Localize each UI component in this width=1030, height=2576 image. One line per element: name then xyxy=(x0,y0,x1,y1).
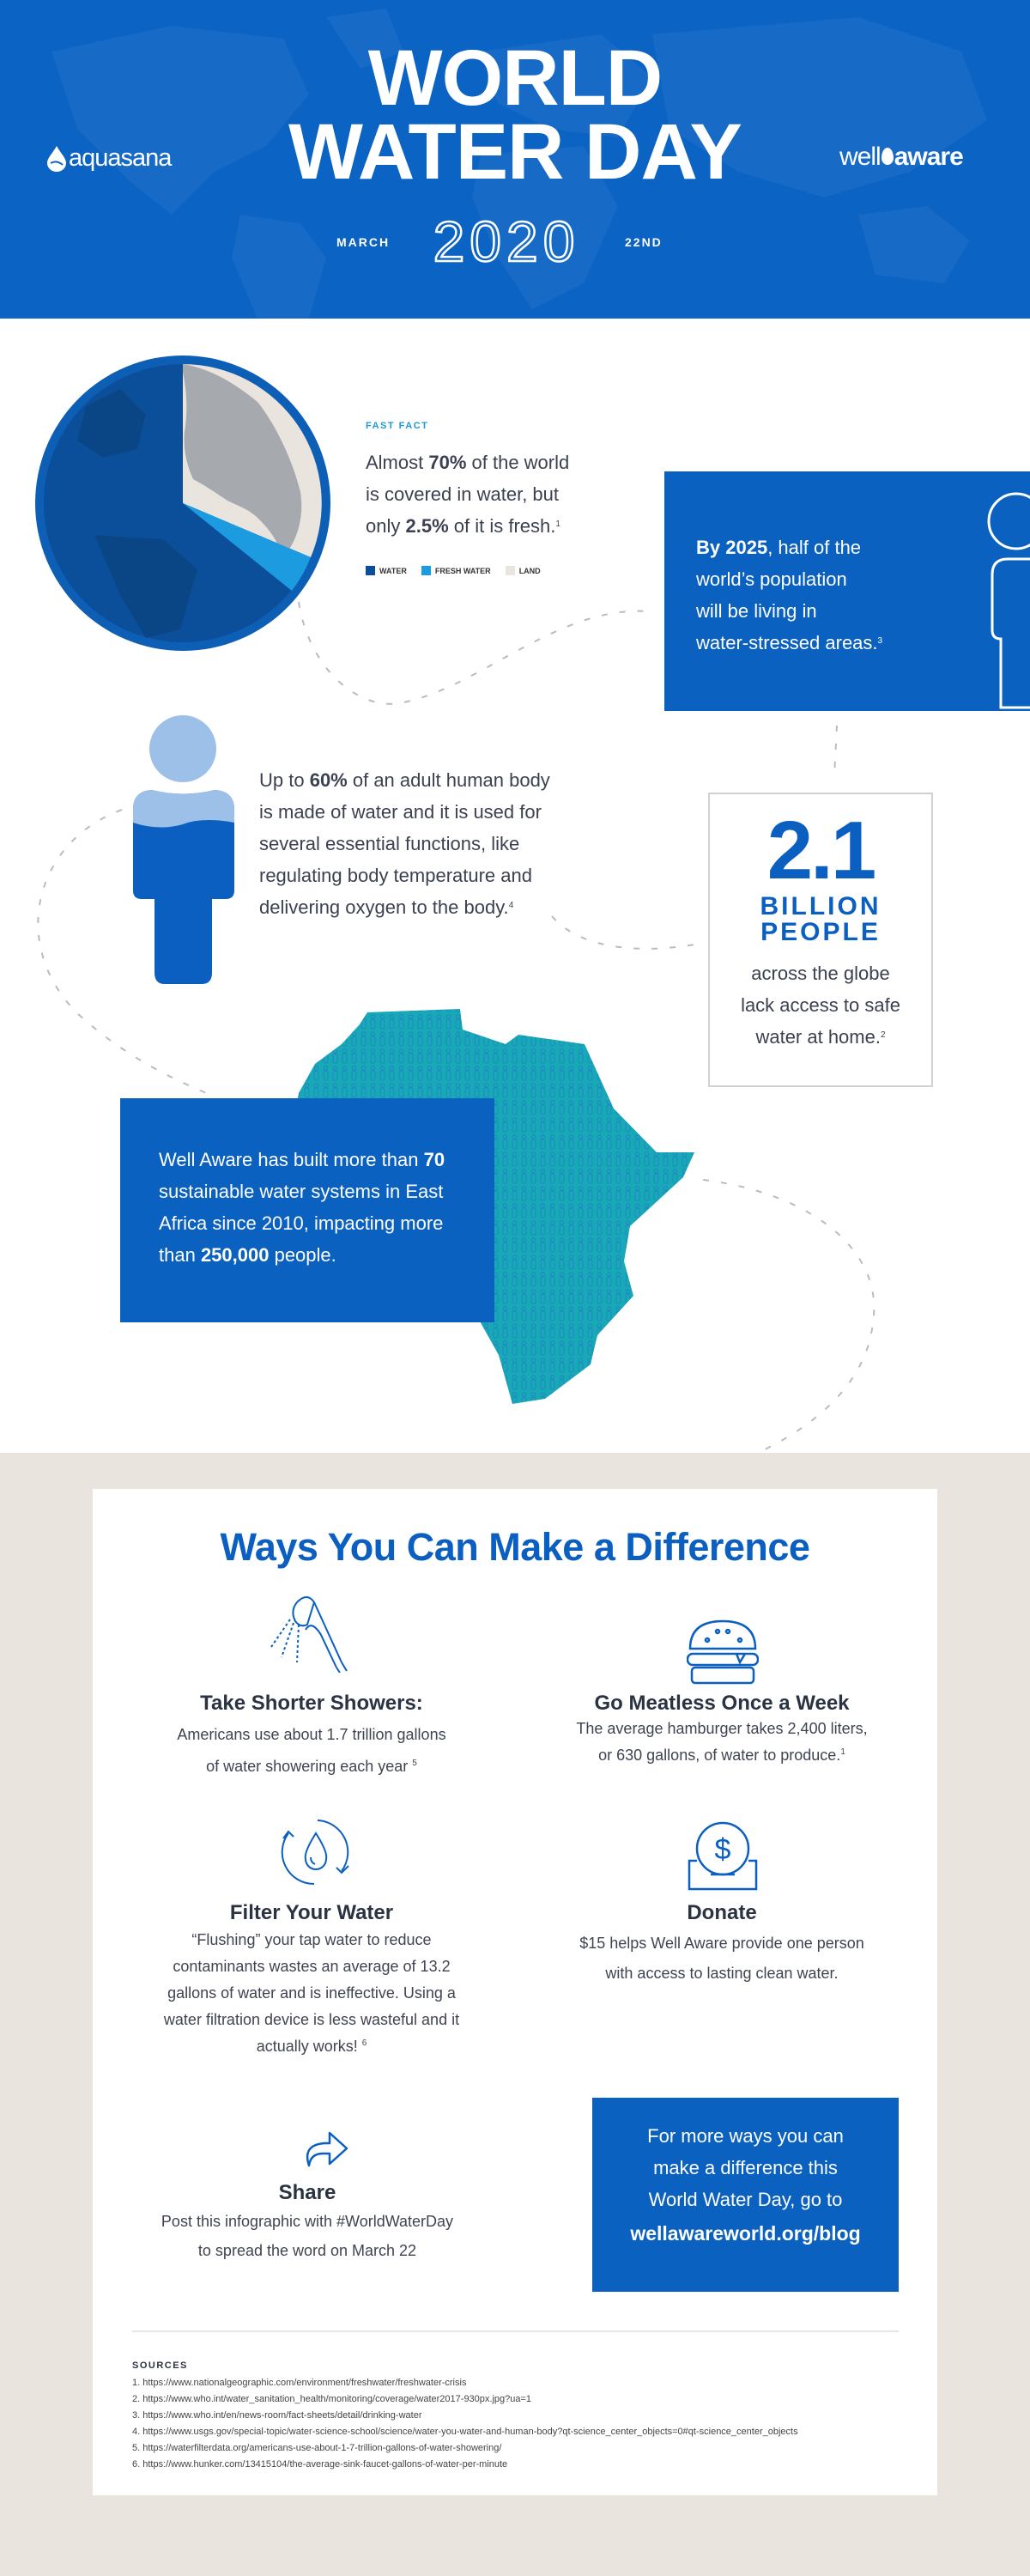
item: share: to spread the word on March 22 xyxy=(198,2242,416,2259)
text: body water: is made of water and it is used for xyxy=(259,801,542,823)
sources: 5. https://waterfilterdata.org/americans-use-about-1-7-trillion-gallons-of-water-showering/ xyxy=(132,2443,501,2453)
icon: donate: $ xyxy=(715,1833,731,1866)
panel: 2.1 billion people: across the globe xyxy=(751,963,890,984)
text: body water xyxy=(259,769,550,918)
item: filter water: contaminants wastes an average of 13.2 xyxy=(173,1958,451,1975)
callout: more ways xyxy=(592,2098,899,2292)
icon: burger xyxy=(687,1619,759,1685)
sources: 6. https://www.hunker.com/13415104/the-average-sink-faucet-gallons-of-water-per-minute xyxy=(132,2459,507,2470)
item: filter water: Filter Your Water xyxy=(230,1901,393,1924)
item: donate: $15 helps Well Aware provide one person xyxy=(579,1935,864,1952)
heading: Ways You Can Make a Difference xyxy=(221,1525,809,1569)
item: shorter showers: Take Shorter Showers: xyxy=(200,1692,423,1715)
date line: MARCH xyxy=(336,235,390,249)
sources xyxy=(132,2360,798,2470)
item: shorter showers: of water showering each year 5 xyxy=(206,1758,417,1775)
item: filter water: gallons of water and is ineffective. Using a xyxy=(167,1984,456,2002)
panel: Well Aware impact: Africa since 2010, impacting more xyxy=(159,1212,443,1234)
item: filter water: “Flushing” your tap water to reduce xyxy=(191,1931,432,1948)
panel: 2.1 billion people: water at home.2 xyxy=(755,1026,886,1048)
callout: more ways: For more ways you can xyxy=(647,2125,844,2147)
item: share xyxy=(161,2181,453,2259)
panel: 2.1 billion people: BILLION xyxy=(760,892,881,920)
map background xyxy=(52,9,987,319)
item: meatless: The average hamburger takes 2,400 liters, xyxy=(576,1720,868,1737)
panel: Well Aware impact: Well Aware has built more than 70 xyxy=(159,1149,445,1170)
item: donate: with access to lasting clean water. xyxy=(605,1965,839,1982)
item: filter water xyxy=(163,1901,459,2055)
title: WORLD xyxy=(368,34,662,122)
icon: person outline xyxy=(987,493,1030,709)
panel: 2.1 billion people: PEOPLE xyxy=(760,918,881,946)
text: body water: delivering oxygen to the body.4 xyxy=(259,896,513,918)
panel: 2.1 billion people: lack access to safe xyxy=(741,994,900,1016)
panel: Well Aware impact: than 250,000 people. xyxy=(159,1244,336,1266)
item: filter water: water filtration device is less wasteful and it xyxy=(164,2011,459,2028)
panel: 2025 water-stressed: water-stressed areas.3 xyxy=(696,632,882,653)
callout: more ways: World Water Day, go to xyxy=(649,2189,842,2210)
panel: Well Aware impact xyxy=(120,1098,494,1322)
sources: 3. https://www.who.int/en/news-room/fact-sheets/detail/drinking-water xyxy=(132,2410,421,2421)
title: WATER DAY xyxy=(288,108,742,196)
date line xyxy=(336,215,663,266)
panel: ways you can make a difference xyxy=(93,1489,937,2495)
title xyxy=(288,34,742,196)
item: shorter showers: Americans use about 1.7 trillion gallons xyxy=(177,1726,446,1743)
logo: aquasana: aquasana xyxy=(69,144,171,172)
callout: more ways: wellawareworld.org/blog xyxy=(630,2222,861,2245)
text: body water: regulating body temperature and xyxy=(259,865,532,886)
fast fact text xyxy=(366,421,569,575)
fast fact text: is covered in water, but xyxy=(366,483,559,505)
item: meatless: or 630 gallons, of water to produce.1 xyxy=(598,1747,845,1764)
item: meatless xyxy=(576,1692,868,1764)
sources: SOURCES xyxy=(132,2360,188,2371)
logo: well aware: well aware xyxy=(839,143,963,171)
legend: WATER FRESH WATER LAND xyxy=(379,567,541,575)
item: filter water: actually works! 6 xyxy=(257,2038,367,2055)
dashed connector lines xyxy=(37,601,876,1449)
item: donate xyxy=(579,1901,864,1982)
item: share: Share xyxy=(279,2181,336,2204)
text: body water: Up to 60% of an adult human body xyxy=(259,769,550,791)
icon: shower xyxy=(270,1596,348,1673)
item: meatless: Go Meatless Once a Week xyxy=(594,1692,850,1715)
panel: 2025 water-stressed: By 2025, half of the xyxy=(696,537,861,558)
date line: 22ND xyxy=(625,235,663,249)
sources: 4. https://www.usgs.gov/special-topic/water-science-school/science/water-you-water-and-human-body?qt-science_center_objects=0#qt-science_center_objects xyxy=(132,2427,798,2437)
globe pie chart xyxy=(35,355,330,651)
fast fact text: FAST FACT xyxy=(366,421,428,431)
header banner xyxy=(0,0,1030,319)
icon: human body water xyxy=(133,715,234,984)
panel: Well Aware impact: sustainable water systems in East xyxy=(159,1181,443,1202)
sources: 2. https://www.who.int/water_sanitation_health/monitoring/coverage/water2017-930px.jpg?ua=1 xyxy=(132,2394,531,2404)
fast fact text: Almost 70% of the world xyxy=(366,452,569,473)
item: donate: Donate xyxy=(687,1901,757,1924)
icon: donate xyxy=(688,1822,757,1891)
fast fact text: only 2.5% of it is fresh.1 xyxy=(366,515,560,537)
icon: filter water xyxy=(282,1820,349,1885)
text: body water: several essential functions, like xyxy=(259,833,519,854)
icon: share arrow xyxy=(306,2131,348,2167)
panel: 2.1 billion people: 2.1 xyxy=(767,805,874,896)
panel: 2.1 billion people xyxy=(708,793,933,1087)
panel: 2025 water-stressed xyxy=(664,471,1030,711)
item: shorter showers xyxy=(177,1692,446,1775)
sources: 1. https://www.nationalgeographic.com/environment/freshwater/freshwater-crisis xyxy=(132,2378,466,2388)
section: beige background xyxy=(0,1453,1030,2576)
panel: 2025 water-stressed: world’s population xyxy=(696,568,847,590)
item: share: Post this infographic with #WorldWaterDay xyxy=(161,2213,453,2230)
panel: 2025 water-stressed: will be living in xyxy=(696,600,817,622)
map: Africa xyxy=(298,1009,694,1404)
callout: more ways: make a difference this xyxy=(653,2157,838,2178)
